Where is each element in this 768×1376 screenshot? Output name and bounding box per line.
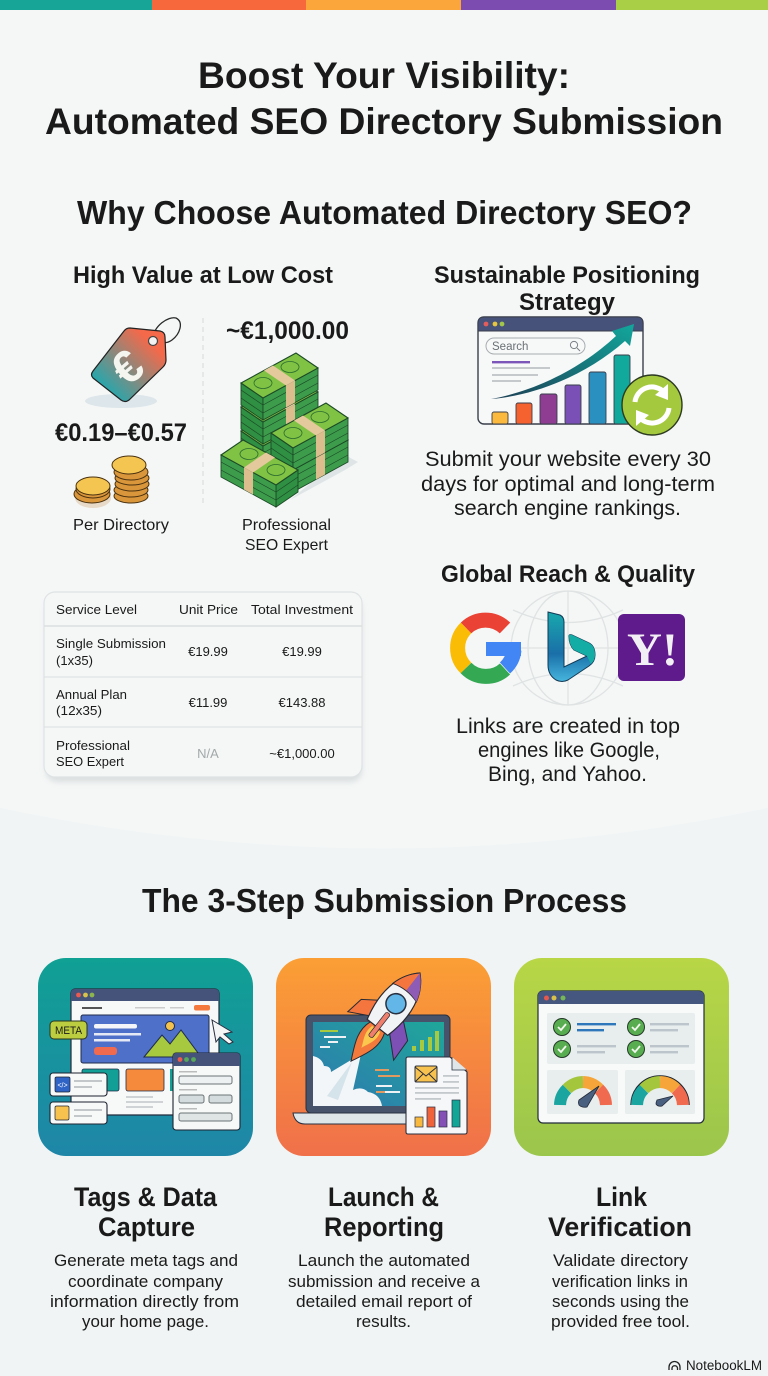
text: step 2 description: Launch the automated	[298, 1251, 470, 1270]
heading: sustainable positioning: Strategy	[519, 289, 616, 316]
card 1 illustration: META	[55, 1025, 83, 1037]
text: step 3 description	[551, 1251, 690, 1331]
icon: price tag	[85, 318, 180, 408]
icon: price tag: €	[100, 339, 154, 395]
icon: money stacks	[221, 353, 358, 507]
text: step 2 description: detailed email report of	[296, 1292, 472, 1311]
text: submit every 30 days	[421, 448, 715, 520]
card 3 illustration	[514, 958, 729, 1156]
top colour band	[0, 0, 768, 10]
heading: tags and data capture	[74, 1182, 218, 1242]
price: low: €0.19–€0.57	[55, 419, 187, 447]
text: links created: Links are created in top	[456, 715, 680, 738]
heading: sustainable positioning: Sustainable Positioning	[434, 262, 700, 289]
text: step 3 description: provided free tool.	[551, 1312, 690, 1331]
lower section background with curved top	[0, 808, 768, 1376]
label: professional seo expert	[242, 517, 331, 554]
row: single submission	[56, 636, 322, 668]
table header	[56, 602, 353, 617]
title	[45, 55, 723, 142]
row: single submission: €19.99	[188, 644, 228, 659]
notebooklm badge: NotebookLM	[686, 1358, 762, 1373]
text: step 1 description: information directly from	[50, 1292, 239, 1311]
heading: launch and reporting	[324, 1182, 444, 1242]
heading: why choose: Why Choose Automated Directory SEO?	[77, 194, 692, 231]
panel: sustainable positioning strategy	[421, 262, 715, 520]
text: links created: engines like Google,	[478, 739, 660, 762]
text: submit every 30 days: days for optimal and long-term	[421, 473, 715, 496]
icon: coins	[74, 456, 149, 508]
icon: globe	[500, 591, 640, 705]
price: expert: ~€1,000.00	[226, 317, 349, 345]
text: step 3 description: verification links in	[552, 1272, 688, 1291]
row: professional seo expert	[56, 738, 335, 769]
text: step 2 description: results.	[356, 1312, 411, 1331]
table header: Unit Price	[179, 602, 238, 617]
text: submit every 30 days: search engine rankings.	[454, 497, 681, 520]
text: links created	[456, 715, 680, 786]
title: Boost Your Visibility:	[198, 55, 570, 96]
heading: link verification: Link	[596, 1182, 648, 1212]
row: annual plan	[56, 687, 326, 718]
row: professional seo expert: SEO Expert	[56, 754, 124, 769]
card 1 illustration	[38, 958, 253, 1156]
row: single submission: €19.99	[282, 644, 322, 659]
heading: tags and data capture: Capture	[98, 1212, 195, 1242]
panel: high value at low cost	[55, 262, 358, 554]
text: step 3 description: Validate directory	[553, 1251, 689, 1270]
title: Automated SEO Directory Submission	[45, 101, 723, 142]
icon: bing	[548, 612, 595, 682]
card 2 illustration	[276, 953, 491, 1156]
text: step 1 description: your home page.	[82, 1312, 209, 1331]
text: submit every 30 days: Submit your website every 30	[425, 448, 711, 471]
heading: link verification: Verification	[548, 1212, 692, 1242]
text: step 2 description: submission and receive a	[288, 1272, 481, 1291]
text: step 2 description	[288, 1251, 481, 1331]
row: annual plan: Annual Plan	[56, 687, 127, 702]
icon: search ranking browser: Search	[492, 341, 528, 353]
panel: global reach and quality	[441, 561, 696, 786]
text: step 1 description: Generate meta tags and	[54, 1251, 238, 1270]
row: single submission: Single Submission	[56, 636, 166, 651]
label: per directory: Per Directory	[73, 517, 169, 534]
step 3: link verification	[514, 958, 729, 1331]
text: links created: Bing, and Yahoo.	[488, 763, 647, 786]
label: professional seo expert: SEO Expert	[245, 537, 329, 554]
heading: link verification	[548, 1182, 692, 1242]
table: pricing comparison	[44, 592, 362, 782]
text: step 1 description: coordinate company	[68, 1272, 224, 1291]
heading: global reach: Global Reach & Quality	[441, 561, 696, 588]
heading: high value: High Value at Low Cost	[73, 262, 333, 289]
row: annual plan: (12x35)	[56, 703, 102, 718]
heading: launch and reporting: Launch &	[328, 1182, 439, 1212]
text: step 1 description	[50, 1251, 239, 1331]
label: professional seo expert: Professional	[242, 517, 331, 534]
row: professional seo expert: N/A	[197, 746, 219, 761]
heading: sustainable positioning	[434, 262, 700, 316]
table header: Service Level	[56, 602, 137, 617]
step 1: tags and data capture	[38, 958, 253, 1331]
text: step 3 description: seconds using the	[552, 1292, 689, 1311]
icon: search ranking browser	[478, 317, 682, 435]
card 1 illustration: </>	[57, 1082, 68, 1090]
step 2: launch and reporting	[276, 953, 491, 1331]
icon: yahoo	[618, 614, 685, 681]
table header: Total Investment	[251, 602, 353, 617]
heading: launch and reporting: Reporting	[324, 1212, 444, 1242]
heading: 3-step process: The 3-Step Submission Process	[142, 882, 627, 919]
row: professional seo expert: ~€1,000.00	[269, 746, 335, 761]
row: single submission: (1x35)	[56, 653, 93, 668]
row: annual plan: €143.88	[278, 695, 326, 710]
heading: tags and data capture: Tags & Data	[74, 1182, 218, 1212]
icon: google	[458, 620, 521, 676]
row: annual plan: €11.99	[189, 695, 227, 710]
row: professional seo expert: Professional	[56, 738, 130, 753]
icon: yahoo: Y!	[627, 624, 678, 676]
